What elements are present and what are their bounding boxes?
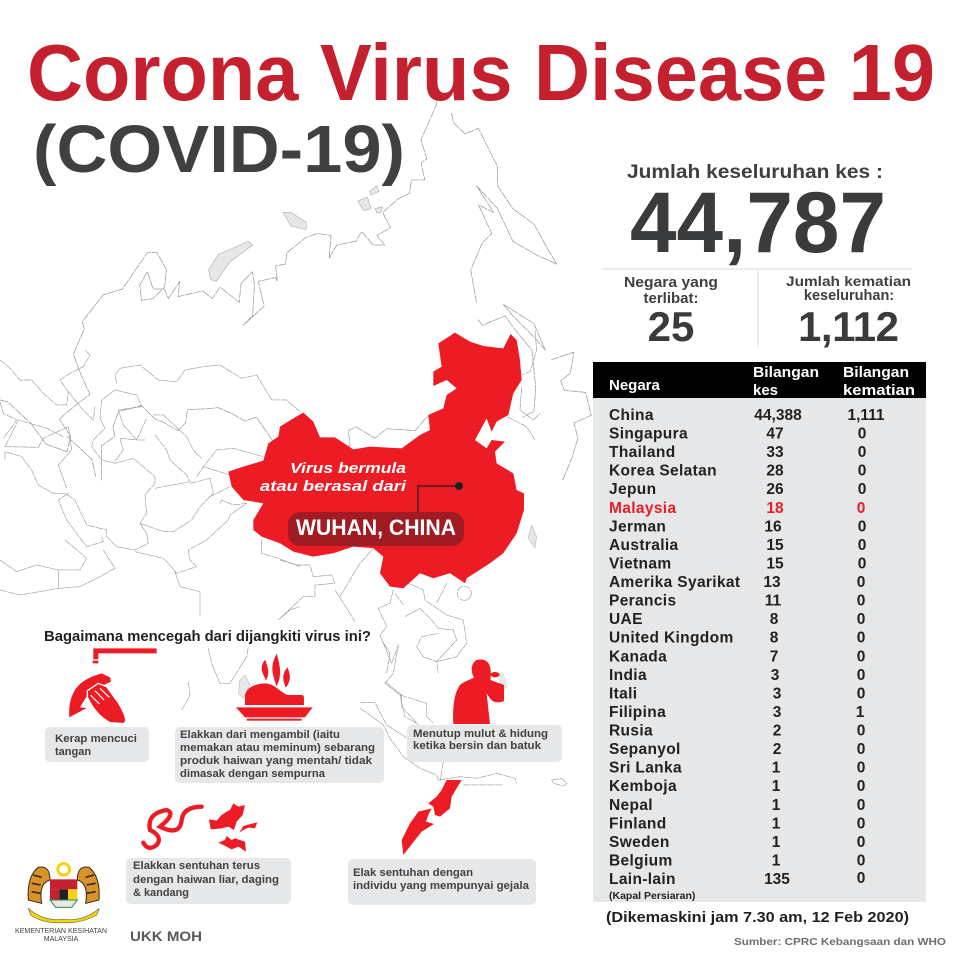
table rows: Belgium (609, 852, 673, 869)
icon: reaching hands (402, 780, 462, 855)
table rows: 0 (858, 444, 866, 461)
table rows: 0 (858, 481, 866, 498)
table rows: 1 (772, 815, 781, 832)
table rows: China (609, 407, 654, 424)
title (27, 28, 935, 187)
table rows: 15 (766, 537, 784, 554)
table rows: 0 (857, 815, 865, 832)
table rows: 135 (764, 871, 790, 888)
table rows: 0 (858, 518, 866, 535)
background map of Asia (0, 96, 591, 786)
table rows: 16 (764, 518, 782, 535)
table rows: 0 (858, 426, 866, 443)
stat: countries involved (624, 274, 718, 350)
source: Sumber: CPRC Kebangsaan dan WHO (734, 936, 946, 948)
caption: cover mouth: Menutup mulut & hidung (413, 728, 548, 740)
icon: person coughing (453, 660, 508, 724)
table rows: 8 (770, 611, 779, 628)
table rows: Thailand (609, 444, 676, 461)
table rows: Malaysia (609, 500, 676, 517)
table header (593, 362, 926, 399)
table rows: 2 (773, 741, 781, 758)
table header: kes (753, 382, 778, 399)
caption: avoid raw food: memakan atau meminum) sebarang (180, 742, 375, 754)
table rows: Vietnam (609, 556, 671, 572)
caption: wash hands (45, 727, 149, 762)
table rows: 3 (773, 704, 782, 721)
table header: kematian (843, 382, 915, 399)
callout: Wuhan label (288, 512, 464, 546)
table rows: 1 (772, 760, 781, 777)
table rows: 0 (857, 778, 865, 795)
table rows: 0 (857, 630, 865, 647)
title: (COVID-19) (33, 112, 405, 187)
table of countries (593, 362, 926, 902)
table rows: 11 (765, 593, 782, 610)
icon: snake (143, 807, 202, 848)
caption: avoid raw food: dimasak dengan sempurna (180, 768, 326, 780)
table rows: Kanada (609, 648, 667, 665)
icon: washing hands (69, 648, 157, 724)
table rows: 0 (857, 574, 865, 591)
stat: countries involved: Negara yang (624, 274, 718, 291)
table rows: 47 (766, 426, 784, 443)
caption: avoid symptomatic people: individu yang mempunyai gejala (353, 880, 530, 892)
table rows: 0 (857, 722, 865, 740)
table rows: Lain-lain (609, 871, 676, 888)
table rows: 0 (857, 611, 865, 628)
table rows: Nepal (609, 797, 653, 814)
caption: avoid raw food (175, 727, 384, 783)
callout: Wuhan pointer (418, 482, 463, 513)
title: Corona Virus Disease 19 (27, 28, 935, 117)
origin text (260, 460, 407, 495)
callout: Wuhan label: WUHAN, CHINA (296, 515, 456, 540)
caption: avoid raw food: Elakkan dari mengambil (iaitu (180, 729, 340, 741)
update date: (Dikemaskini jam 7.30 am, 12 Feb 2020) (606, 909, 909, 926)
map of China in red (228, 333, 524, 588)
table rows: United Kingdom (609, 630, 734, 647)
origin text: atau berasal dari (260, 478, 407, 495)
table rows: 0 (858, 556, 866, 572)
caption: avoid wild animals: & kandang (133, 887, 189, 899)
table rows: Perancis (609, 593, 676, 610)
prevention heading: Bagaimana mencegah dari dijangkiti virus ini? (44, 628, 371, 645)
table rows: 33 (766, 444, 784, 461)
ministry name: MALAYSIA (44, 936, 79, 943)
table rows (609, 407, 885, 902)
table rows: 1,111 (847, 407, 885, 424)
table header: Bilangan (843, 364, 909, 381)
table rows: UAE (609, 611, 643, 628)
table rows: 0 (857, 685, 865, 702)
caption: wash hands: Kerap mencuci (55, 733, 137, 745)
table rows: Korea Selatan (609, 463, 717, 480)
icon: cooked food (236, 655, 313, 721)
caption: cover mouth: ketika bersin dan batuk (413, 740, 542, 752)
table rows: 0 (857, 870, 865, 887)
table rows: 0 (858, 537, 866, 554)
caption: avoid symptomatic people (348, 859, 536, 905)
caption: avoid raw food: produk haiwan yang mentah/ tidak (180, 755, 373, 767)
table rows: 0 (857, 741, 865, 758)
table rows: 3 (771, 667, 780, 684)
dividers (603, 269, 912, 347)
table rows: Australia (609, 537, 679, 554)
caption: wash hands: tangan (55, 746, 91, 758)
stat: countries involved: 25 (648, 303, 694, 350)
table body background (593, 398, 926, 902)
table rows: 26 (766, 481, 784, 498)
table rows: 0 (857, 500, 865, 517)
caption: avoid symptomatic people: Elak sentuhan dengan (353, 867, 473, 879)
total cases: 44,787 (630, 175, 886, 271)
table rows: Kemboja (609, 778, 677, 795)
table rows: Sepanyol (609, 741, 681, 758)
table rows: 0 (857, 797, 865, 814)
table rows: 1 (856, 704, 865, 721)
table rows: 1 (772, 778, 781, 795)
stat: total deaths: Jumlah kematian (786, 273, 911, 289)
table rows: 28 (766, 463, 784, 480)
table rows: 2 (773, 722, 781, 740)
caption: cover mouth (407, 725, 562, 762)
table rows: 0 (857, 667, 865, 684)
caption: avoid wild animals: dengan haiwan liar, daging (133, 874, 279, 886)
table rows: Amerika Syarikat (609, 574, 740, 591)
table rows: Jerman (609, 518, 666, 535)
UKK MOH label: UKK MOH (130, 929, 202, 944)
stat: total deaths: keseluruhan: (804, 288, 894, 304)
caption: avoid wild animals (126, 858, 291, 904)
stat: total deaths: 1,112 (798, 303, 899, 350)
table rows: Itali (609, 685, 637, 702)
table header: Negara (609, 377, 661, 394)
ministry name (15, 928, 107, 943)
table rows: 7 (770, 648, 778, 665)
icon: bats (209, 803, 257, 852)
table rows: 1 (772, 834, 781, 851)
table rows: 13 (763, 574, 781, 591)
table rows: Sri Lanka (609, 760, 682, 777)
table rows: 8 (770, 630, 779, 647)
table rows: Sweden (609, 834, 670, 851)
table rows: (Kapal Persiaran) (609, 890, 695, 902)
table rows: 0 (858, 463, 866, 480)
caption: avoid wild animals: Elakkan sentuhan terus (133, 860, 260, 872)
table rows: 3 (773, 685, 782, 702)
ministry name: KEMENTERIAN KESIHATAN (15, 928, 107, 935)
total cases: Jumlah keseluruhan kes : (627, 162, 883, 183)
table rows: India (609, 667, 647, 684)
logo: Malaysian coat of arms (28, 862, 99, 923)
table rows: 15 (766, 556, 784, 572)
table rows: 0 (857, 648, 865, 665)
stat: total deaths (786, 273, 911, 350)
table rows: Filipina (609, 704, 666, 721)
table rows: Rusia (609, 722, 653, 740)
table rows: Jepun (609, 481, 656, 498)
table rows: 1 (772, 797, 781, 814)
stat: countries involved: terlibat: (643, 290, 699, 307)
table rows: Singapura (609, 426, 688, 443)
table rows: 1 (772, 852, 781, 869)
origin text: Virus bermula (290, 460, 406, 477)
table rows: 0 (857, 852, 865, 869)
table rows: 18 (766, 500, 784, 517)
table rows: Finland (609, 815, 667, 832)
table rows: 0 (857, 593, 865, 610)
table header: Bilangan (753, 364, 819, 381)
table rows: 0 (857, 760, 865, 777)
table rows: 44,388 (754, 407, 802, 424)
table rows: 0 (857, 834, 865, 851)
